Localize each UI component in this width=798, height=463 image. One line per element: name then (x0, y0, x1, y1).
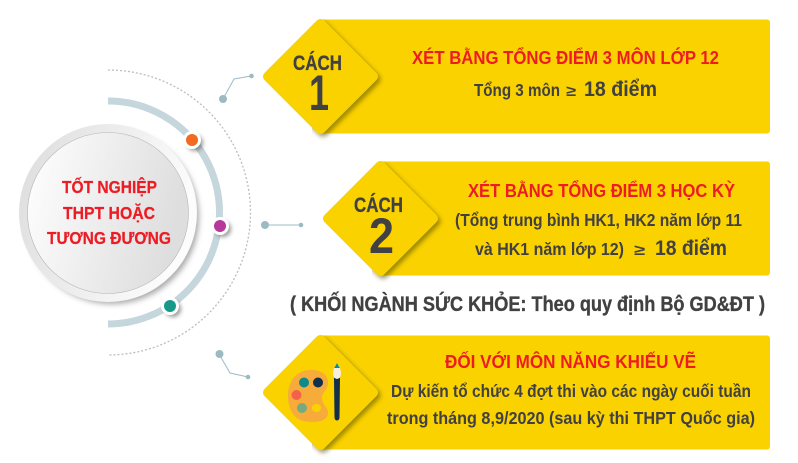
magenta node (211, 217, 231, 237)
diamond badge 2 (321, 159, 440, 278)
panel 1 text: Tổng 3 môn (474, 80, 560, 100)
circle heading: TƯƠNG ĐƯƠNG (47, 228, 171, 248)
badge label 2: 2 (369, 208, 394, 264)
panel 3 text line 2: trong tháng 8,9/2020 (sau kỳ thi THPT Quốc gia) (387, 408, 755, 428)
panel 2 text line 2: ≥ (634, 242, 645, 259)
badge label 1 (293, 52, 342, 121)
diamond badge 3 (261, 333, 380, 452)
circle heading: TỐT NGHIỆP (62, 176, 157, 197)
panel: cách 1 (261, 17, 770, 139)
circle heading: THPT HOẶC (63, 202, 155, 223)
badge label 2: CÁCH (354, 194, 403, 217)
badge label 1: CÁCH (293, 52, 342, 75)
panel 2 text line 2: 18 điểm (655, 236, 727, 260)
dotted outer arc (108, 70, 250, 355)
panel 1 text (474, 77, 657, 101)
connector 1 (219, 74, 254, 103)
thick arc (108, 101, 220, 324)
icon: palette and brush (288, 363, 341, 422)
badge label 1: 1 (309, 65, 329, 121)
panel 1 text: ≥ (566, 83, 576, 100)
panel 3 title: ĐỐI VỚI MÔN NĂNG KHIẾU VẼ (445, 351, 696, 372)
panel 2 text line 2: và HK1 năm lớp 12) (475, 239, 624, 259)
panel 1 title: XÉT BẰNG TỔNG ĐIỂM 3 MÔN LỚP 12 (412, 47, 719, 68)
connector 2 (261, 221, 303, 229)
teal node (161, 297, 181, 317)
panel 3 text line 1: Dự kiến tổ chức 4 đợt thi vào các ngày cuối tuần (391, 381, 751, 401)
badge label 2 (354, 194, 403, 264)
diamond badge 1 (261, 17, 380, 136)
panel 2 title: XÉT BẰNG TỔNG ĐIỂM 3 HỌC KỲ (468, 180, 735, 201)
panel: năng khiếu vẽ (261, 333, 770, 455)
panel 2 text line 1: (Tổng trung bình HK1, HK2 năm lớp 11 (455, 210, 742, 230)
central circle (19, 124, 199, 304)
panel 2 text line 2 (475, 236, 727, 260)
orange node (183, 131, 203, 151)
panel: cách 2 (321, 159, 770, 281)
connector 3 (216, 350, 250, 379)
panel 1 text: 18 điểm (584, 77, 657, 101)
circle heading (47, 176, 171, 248)
